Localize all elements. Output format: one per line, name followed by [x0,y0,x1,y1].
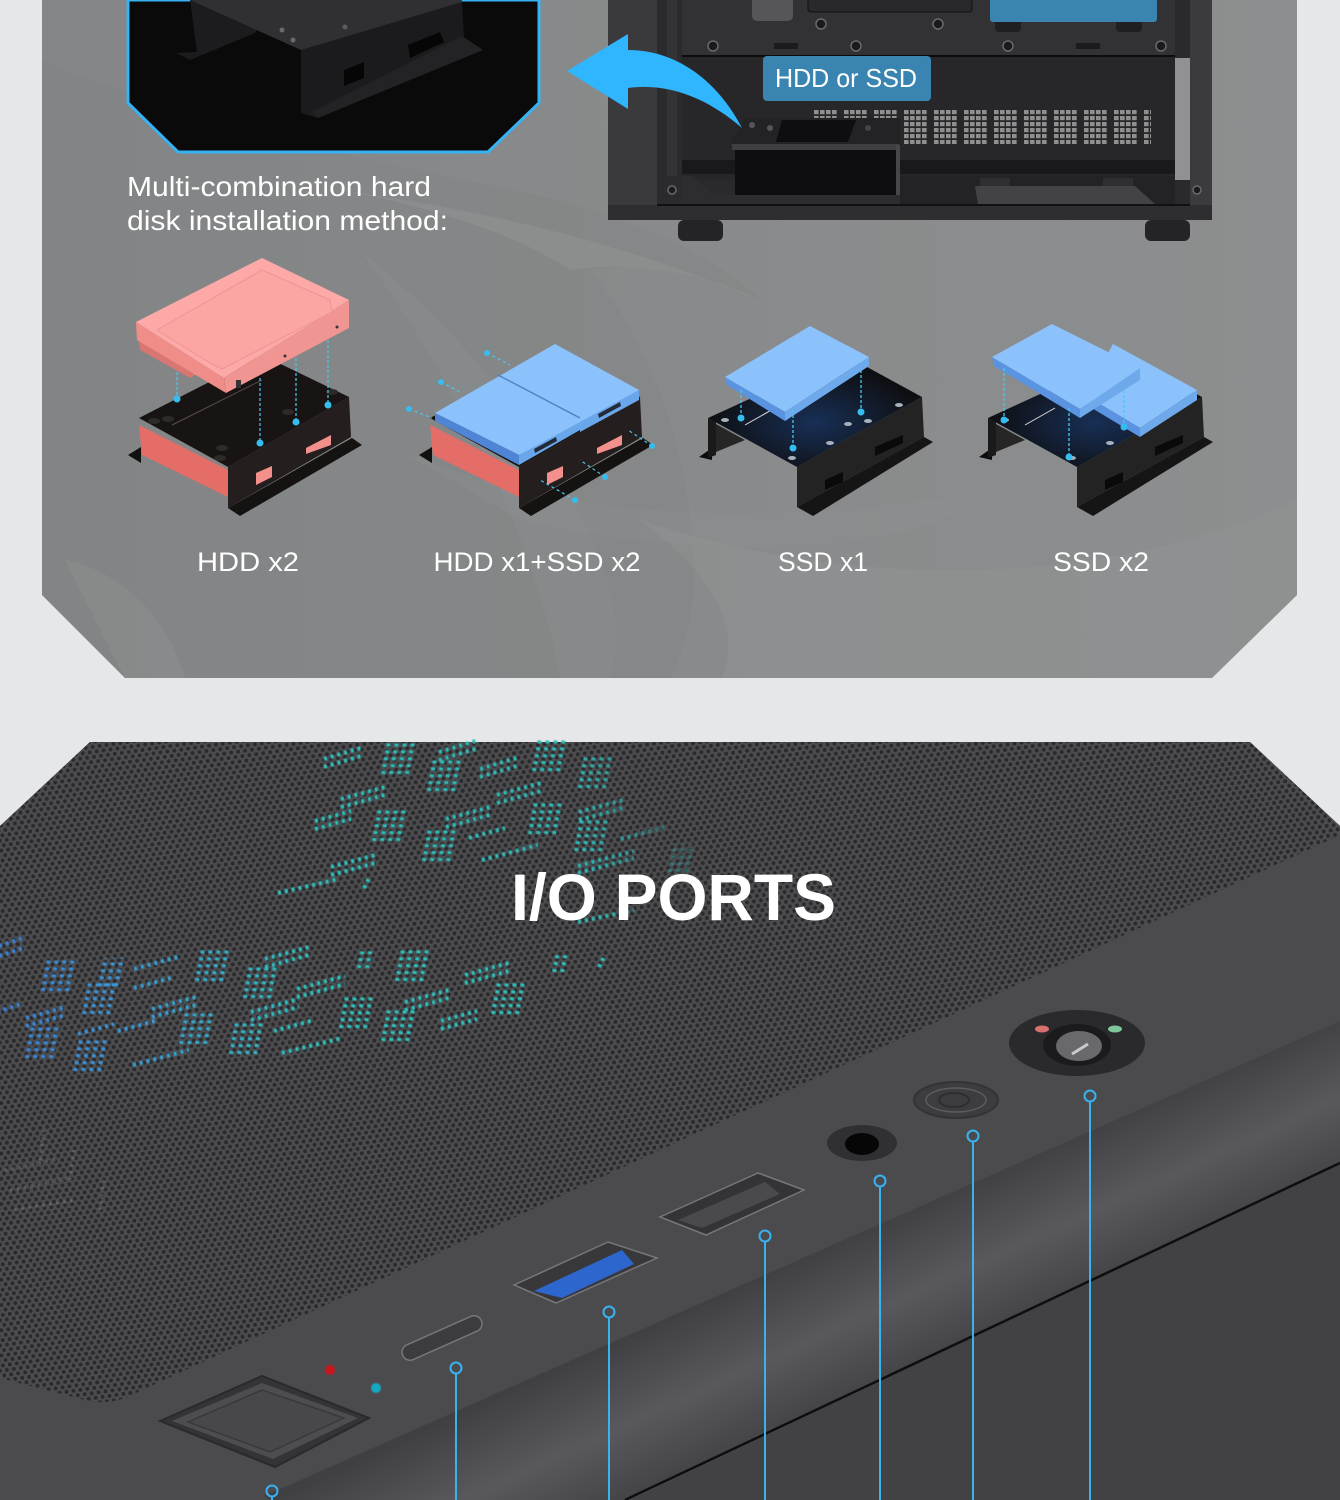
arrow: from drive bay to inset [567,34,742,128]
label: HDD or SSD [763,56,931,101]
button: power knob [1009,1010,1145,1076]
label: SSD x2: SSD x2 [1053,547,1149,577]
inset: bracket close-up [128,0,539,152]
drive cage [732,118,900,205]
LED glow through mesh, lower [0,938,604,1071]
label: HDD or SSD: HDD or SSD [775,63,917,93]
illustration: HDD x2 [128,258,362,516]
pink hard drive [136,258,349,393]
port: USB 2.0 [660,1173,804,1235]
label: SSD x1: SSD x1 [778,547,868,577]
illustration: SSD x2 [979,324,1213,516]
panel: hard disk installation [42,0,1297,678]
port: power button [160,1376,369,1467]
port: USB-C [399,1313,485,1363]
faint white LEDs [5,1130,104,1210]
port: audio jack [827,1125,897,1161]
port: USB 3.0 [514,1242,657,1303]
panel: I/O ports case top [0,739,1340,1500]
case feet [678,220,1190,241]
label: HDD x2: HDD x2 [197,547,299,577]
mesh top panel [0,742,1340,1402]
blue SSD [725,326,869,421]
front SSD [992,324,1140,418]
callout lines [266,1090,1096,1500]
text: multi-combination method [127,171,448,236]
blue drives on bracket [435,344,639,465]
label: HDD x1+SSD x2: HDD x1+SSD x2 [434,547,640,577]
text: multi-combination method: Multi-combination hard [127,171,431,202]
computer case interior [608,0,1212,241]
text: multi-combination method: disk installation method: [127,205,448,236]
title: I/O PORTS [511,860,836,934]
LED indicators [325,1365,381,1393]
button: reset [914,1082,998,1118]
illustration: HDD x1 + SSD x2 [406,344,655,516]
illustration: SSD x1 [699,326,933,516]
back SSD [1085,344,1197,437]
LED glow through mesh, upper [278,739,692,922]
